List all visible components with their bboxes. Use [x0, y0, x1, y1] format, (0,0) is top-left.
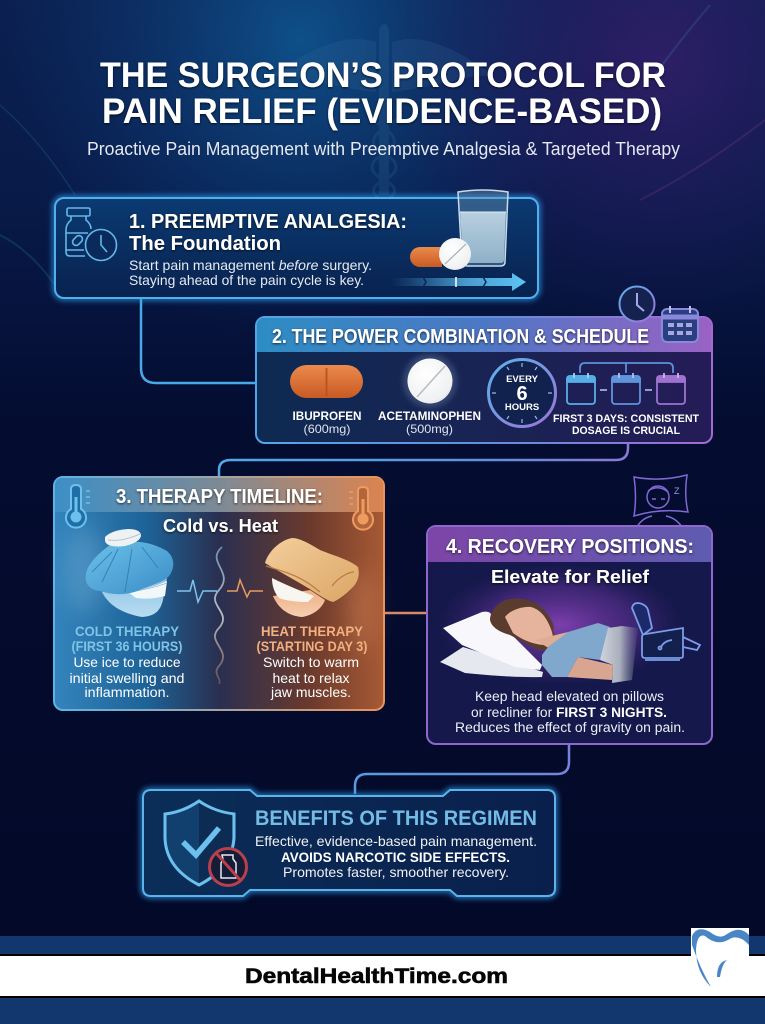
- footer band: [0, 928, 765, 1024]
- glass of water: [458, 190, 508, 266]
- heat therapy text: jaw muscles.: [270, 684, 351, 700]
- body text: Reduces the effect of gravity on pain.: [455, 720, 685, 735]
- cold therapy text: (FIRST 36 HOURS): [72, 638, 182, 654]
- body text: Start pain management before surgery.: [129, 257, 372, 273]
- cold therapy text: COLD THERAPY: [75, 623, 180, 639]
- heading: 4. RECOVERY POSITIONS:: [446, 535, 694, 558]
- logo: tooth: [691, 928, 749, 987]
- heading: BENEFITS OF THIS REGIMEN: [255, 807, 537, 830]
- ice pack on jaw: [86, 529, 173, 617]
- cold therapy text: Use ice to reduce: [74, 654, 181, 670]
- panel 1: preemptive analgesia: [55, 190, 538, 298]
- header band: [428, 527, 711, 562]
- panel 4: recovery positions: [427, 526, 712, 744]
- heading: 3. THERAPY TIMELINE:: [116, 486, 323, 508]
- icon: recliner: [632, 603, 700, 660]
- subtitle: Proactive Pain Management with Preemptive Analgesia & Targeted Therapy: [87, 139, 680, 159]
- title: PAIN RELIEF (EVIDENCE-BASED): [102, 92, 662, 131]
- title: THE SURGEON’S PROTOCOL FOR: [100, 56, 666, 95]
- dial: every 6 hours: [488, 360, 556, 426]
- schedule caption: DOSAGE IS CRUCIAL: [572, 425, 680, 437]
- ibuprofen label: (600mg): [304, 422, 350, 436]
- body text: AVOIDS NARCOTIC SIDE EFFECTS.: [281, 849, 510, 865]
- icon: sleeping person: Z: [674, 486, 680, 496]
- body text: Effective, evidence-based pain management.: [255, 833, 537, 849]
- icon: hot thermometer: [349, 487, 373, 530]
- body text: [455, 689, 685, 735]
- body text: [255, 833, 537, 880]
- dial: every 6 hours: EVERY: [506, 374, 539, 385]
- icon: pill bottle and clock: [66, 208, 116, 260]
- cold therapy text: initial swelling and: [70, 670, 184, 686]
- header band: [55, 478, 383, 512]
- pills: [410, 238, 471, 270]
- towel on jaw: [265, 538, 359, 617]
- subheading: Elevate for Relief: [491, 566, 650, 587]
- heat therapy text: HEAT THERAPY: [261, 623, 364, 639]
- heat therapy text: (STARTING DAY 3): [256, 638, 368, 654]
- acetaminophen tablet: [403, 354, 457, 408]
- heat therapy text: [256, 623, 368, 700]
- frost and heat texture: [63, 528, 376, 650]
- website: DentalHealthTime.com: [245, 965, 508, 988]
- heading: 1. PREEMPTIVE ANALGESIA:: [129, 211, 407, 233]
- panel 5: benefits of this regimen: [143, 790, 555, 896]
- schedule caption: [553, 413, 699, 437]
- heat therapy text: Switch to warm: [263, 654, 359, 670]
- sleeping woman on pillows: [435, 563, 685, 687]
- watermark: caduceus: [270, 24, 494, 200]
- body text: Keep head elevated on pillows: [475, 689, 664, 704]
- heading: [129, 211, 407, 255]
- icon: clock: [620, 286, 654, 322]
- calendars: first 3 days: [567, 363, 685, 404]
- connectors between panels: [141, 298, 628, 794]
- schedule caption: FIRST 3 DAYS: CONSISTENT: [553, 413, 699, 425]
- timeline arrow: [392, 273, 526, 291]
- body text: [129, 257, 372, 288]
- title: [100, 56, 666, 131]
- cold therapy text: [70, 623, 184, 700]
- ibuprofen pill: [290, 365, 363, 398]
- body text: or recliner for FIRST 3 NIGHTS.: [471, 705, 667, 720]
- icon: calendar: [662, 306, 698, 342]
- cold therapy text: inflammation.: [84, 684, 170, 700]
- pulse lines: [177, 580, 263, 602]
- wavy divider: [215, 547, 224, 684]
- header band: [257, 318, 711, 352]
- ibuprofen label: [292, 409, 362, 436]
- panel 2: power combination and schedule: [256, 286, 712, 443]
- dial: every 6 hours: 6: [516, 383, 528, 405]
- body text: Staying ahead of the pain cycle is key.: [129, 272, 364, 288]
- acetaminophen label: [378, 409, 481, 436]
- icon: sleeping person: [634, 475, 688, 527]
- heading: The Foundation: [129, 233, 281, 255]
- panel 3: therapy timeline: [54, 477, 384, 710]
- acetaminophen label: (500mg): [406, 422, 453, 436]
- icon: cold thermometer: [66, 485, 90, 528]
- dial: every 6 hours: HOURS: [505, 402, 539, 413]
- ibuprofen label: IBUPROFEN: [292, 409, 362, 423]
- body text: Promotes faster, smoother recovery.: [283, 864, 509, 880]
- acetaminophen label: ACETAMINOPHEN: [378, 409, 481, 423]
- icon: shield and no-narcotic sign: [165, 801, 246, 886]
- heading: 2. THE POWER COMBINATION & SCHEDULE: [272, 326, 649, 348]
- subheading: Cold vs. Heat: [163, 516, 278, 536]
- heat therapy text: heat to relax: [272, 670, 350, 686]
